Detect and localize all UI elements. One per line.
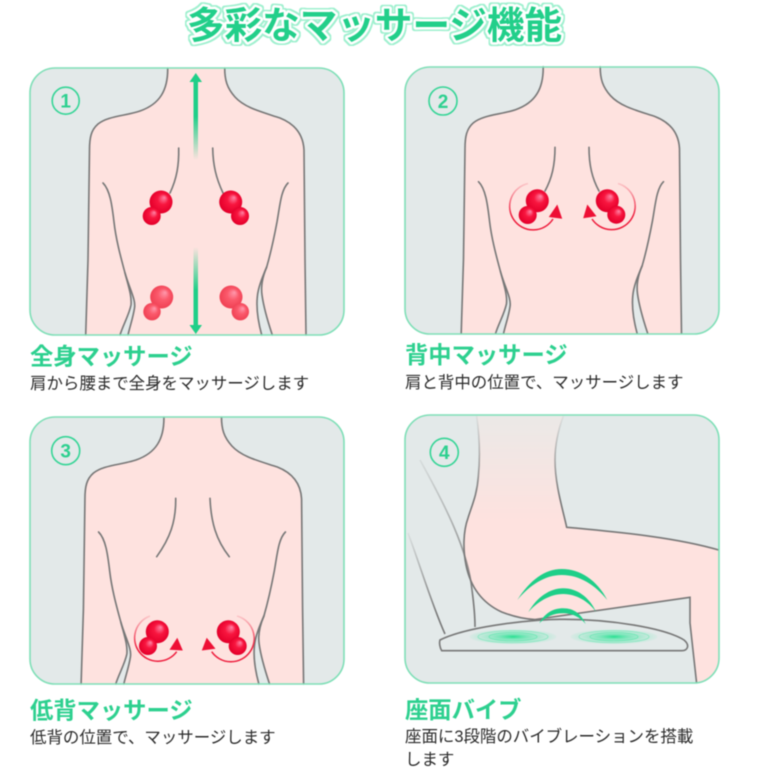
number 1: [52, 87, 79, 114]
chair back lines: [408, 460, 475, 634]
number 1: 1: [60, 92, 71, 112]
rotation arrows: [510, 184, 635, 230]
heading 1: 全身マッサージ: [30, 344, 193, 370]
heading 4: 座面バイブ: [405, 696, 521, 723]
massage balls: [519, 189, 625, 224]
title: 多彩なマッサージ機能: [187, 4, 562, 46]
heading 3: 低背マッサージ: [30, 698, 193, 724]
description 1: 肩から腰まで全身をマッサージします: [30, 375, 309, 393]
number 2: 2: [438, 92, 448, 113]
vibration waves: [517, 569, 607, 624]
frame: [405, 415, 719, 683]
panel: lower back massage: [30, 417, 344, 684]
body outline: [81, 417, 304, 684]
panel: seat vibration: [405, 415, 722, 684]
rotation arrows: [135, 616, 254, 662]
description 4: 座面に3段階のバイブレーションを搭載: [405, 727, 693, 746]
arrow: down: [190, 247, 202, 334]
frame: [405, 67, 719, 334]
number 4: [430, 438, 458, 466]
massage balls: lower: [143, 286, 249, 320]
arrow: up: [190, 73, 202, 160]
body outline: [86, 68, 306, 335]
seated body: [408, 416, 722, 684]
shoulder blade lines: [170, 148, 223, 193]
panel: full body massage: [30, 68, 344, 335]
number 4: 4: [439, 443, 450, 464]
massage balls: [139, 620, 247, 655]
description 4: します: [405, 751, 454, 769]
shoulder blade lines: [545, 147, 599, 191]
massage balls: upper: [143, 190, 249, 225]
vibration ripples: right: [570, 629, 658, 644]
description 3: 低背の位置で、マッサージします: [30, 729, 276, 747]
shoulder blade lines: [157, 498, 229, 557]
vibration ripples: left: [470, 629, 556, 644]
number 3: [52, 437, 80, 465]
description 2: 肩と背中の位置で、マッサージします: [405, 374, 683, 392]
seat cushion: [440, 619, 688, 651]
number 3: 3: [60, 442, 71, 462]
heading 2: 背中マッサージ: [405, 342, 568, 368]
number 2: [429, 87, 457, 115]
frame: [30, 68, 344, 335]
body outline: [461, 67, 682, 334]
frame: [30, 417, 344, 684]
panel: back massage: [405, 67, 719, 334]
